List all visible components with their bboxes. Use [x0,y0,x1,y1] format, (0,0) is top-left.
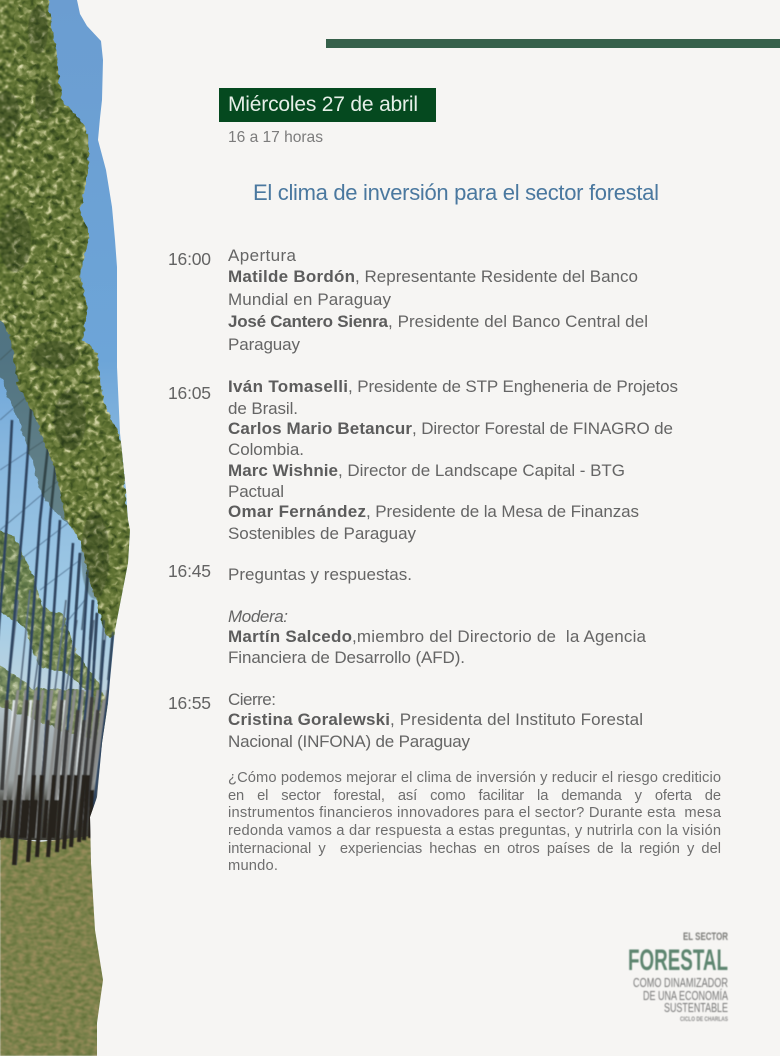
main foliage band [0,0,138,645]
speakers 16:05: , Director Forestal de FINAGRO de [412,419,673,438]
speakers 16:00 [228,246,648,354]
agenda item 16:55 [168,690,643,751]
time 16:00: 16:00 [168,249,211,269]
description paragraph: en el sector forestal, así como facilitar la demanda y oferta de [228,788,721,804]
closing speakers: Cierre: [228,690,276,709]
speakers 16:00: Paraguay [228,335,300,354]
description paragraph: internacional y experiencias hechas en otros países de la región y del [228,841,721,857]
questions and moderator: Preguntas y respuestas. [228,565,412,584]
speakers 16:05: , Presidente de la Mesa de Finanzas [366,502,639,521]
time 16:55: 16:55 [168,693,211,713]
questions and moderator: ,miembro del Directorio de la Agencia [352,627,647,646]
closing speakers [228,690,643,751]
agenda item 16:00 [168,246,648,354]
foliage shadows [0,6,109,599]
questions and moderator [228,565,647,667]
speakers 16:05: Carlos Mario Betancur [228,419,412,438]
closing speakers: Nacional (INFONA) de Paraguay [228,732,470,751]
tree trunks [0,340,113,865]
session title: El clima de inversión para el sector forestal [253,180,659,205]
photo: row of forest trees with sky and grass [0,0,138,1056]
agenda item 16:05 [168,377,678,543]
description paragraph: redonda vamos a dar respuesta a estas preguntas, y nutrirla con la visión [228,823,721,839]
dark fringe of branches left of main foliage [0,320,72,527]
grass [0,836,103,1056]
speakers 16:00: José Cantero Sienra [228,312,389,331]
trunks crossing the lower foliage [76,553,113,680]
speakers 16:05: Pactual [228,482,284,501]
speakers 16:00: , Representante Residente del Banco [355,267,638,286]
speakers 16:05: Colombia. [228,440,304,459]
logo: El sector forestal: COMO DINAMIZADOR [633,976,728,990]
speakers 16:00: , Presidente del Banco Central del [388,312,648,331]
foliage left edge fill [0,0,14,300]
logo: El sector forestal [628,931,728,1023]
speakers 16:00: Mundial en Paraguay [228,290,392,309]
questions and moderator: Modera: [228,607,288,626]
shaded band behind trunks [0,690,106,840]
questions and moderator: Financiera de Desarrollo (AFD). [228,648,465,667]
logo: El sector forestal: EL SECTOR [683,931,728,943]
speakers 16:05: Iván Tomaselli [228,377,348,396]
description paragraph: mundo. [228,858,278,874]
agenda item 16:45 [168,561,647,667]
questions and moderator: Martín Salcedo [228,627,352,646]
closing speakers: Cristina Goralewski [228,710,390,729]
time 16:05: 16:05 [168,383,211,403]
logo: El sector forestal: SUSTENTABLE [664,1001,728,1015]
speakers 16:05: , Presidente de STP Engheneria de Projetos [348,377,678,396]
description paragraph [228,770,722,874]
description paragraph: instrumentos financieros innovadores para el sector? Durante esta mesa [228,805,722,821]
date label: Miércoles 27 de abril [228,93,418,116]
description paragraph: ¿Cómo podemos mejorar el clima de inversión y reducir el riesgo crediticio [228,770,721,786]
logo: El sector forestal: CICLO DE CHARLAS [680,1016,728,1023]
speakers 16:05: Sostenibles de Paraguay [228,524,416,543]
top green bar [326,39,780,48]
speakers 16:05 [228,377,678,543]
speakers 16:00: Apertura [228,246,297,265]
logo: El sector forestal: DE UNA ECONOMÍA [643,988,728,1003]
back foliage rows [0,525,113,750]
sky [0,0,135,860]
closing speakers: , Presidenta del Instituto Forestal [390,710,643,729]
time range: 16 a 17 horas [228,129,323,146]
speakers 16:00: Matilde Bordón [228,267,355,286]
date label [219,88,436,122]
speakers 16:05: Omar Fernández [228,502,366,521]
speakers 16:05: de Brasil. [228,399,298,418]
speakers 16:05: , Director de Landscape Capital - BTG [338,461,625,480]
time 16:45: 16:45 [168,561,211,581]
speakers 16:05: Marc Wishnie [228,461,338,480]
